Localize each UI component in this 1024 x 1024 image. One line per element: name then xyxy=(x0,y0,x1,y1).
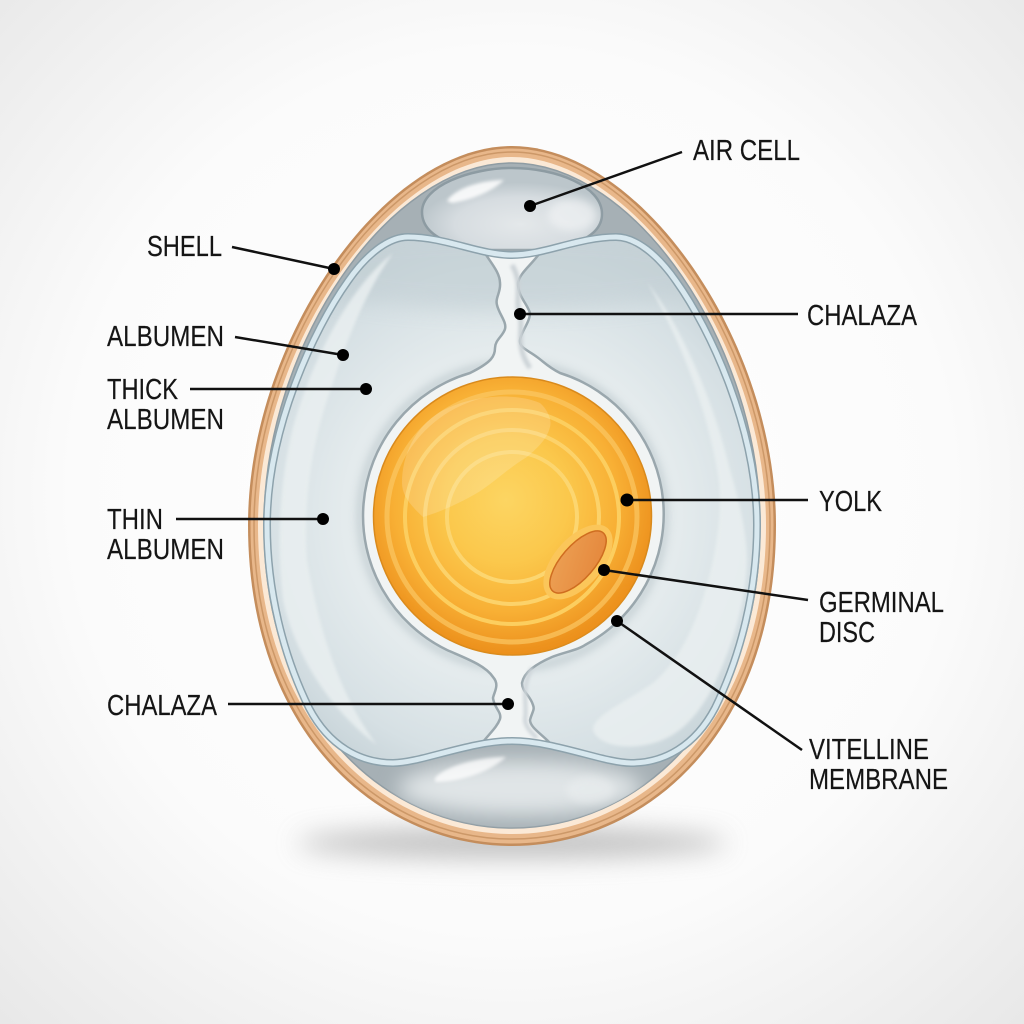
label: germinal disc: GERMINAL xyxy=(819,587,944,619)
yolk xyxy=(374,377,652,659)
albumen xyxy=(267,230,757,763)
label: shell: SHELL xyxy=(147,231,222,263)
label: air cell xyxy=(524,135,800,212)
label: vitelline membrane: MEMBRANE xyxy=(809,764,948,796)
label: air cell: AIR CELL xyxy=(693,135,800,167)
label: thick albumen: ALBUMEN xyxy=(107,404,224,436)
egg diagram xyxy=(248,146,776,846)
albumen top shade xyxy=(374,254,650,312)
ground shadow xyxy=(297,828,727,858)
top air cell xyxy=(422,168,602,252)
label: yolk xyxy=(620,486,883,518)
right light crescent and blob xyxy=(593,282,747,746)
germinal disc xyxy=(530,512,626,612)
label: yolk: YOLK xyxy=(819,486,883,518)
shell xyxy=(248,146,776,846)
label: upper chalaza: CHALAZA xyxy=(807,300,918,332)
membrane line xyxy=(267,237,757,763)
left light crescent xyxy=(280,253,393,745)
yolk rings xyxy=(387,392,637,642)
label: vitelline membrane xyxy=(611,615,948,796)
label: vitelline membrane: VITELLINE xyxy=(809,734,929,766)
label: germinal disc: DISC xyxy=(819,617,875,649)
vitelline shadow xyxy=(360,364,664,668)
label: albumen: ALBUMEN xyxy=(107,321,224,353)
label: lower chalaza xyxy=(107,690,514,722)
lower air space xyxy=(398,757,642,815)
label: thin albumen: ALBUMEN xyxy=(107,534,224,566)
label: shell xyxy=(147,231,340,275)
label: lower chalaza: CHALAZA xyxy=(107,690,218,722)
shell cavity xyxy=(264,163,760,828)
label: germinal disc xyxy=(598,564,944,649)
label: thick albumen xyxy=(107,374,372,436)
label: upper chalaza xyxy=(514,300,918,332)
label: thin albumen xyxy=(107,504,329,566)
label: thick albumen: THICK xyxy=(107,374,179,406)
label: albumen xyxy=(107,321,349,361)
label: thin albumen: THIN xyxy=(107,504,163,536)
vitelline membrane with chalazae xyxy=(363,250,664,742)
